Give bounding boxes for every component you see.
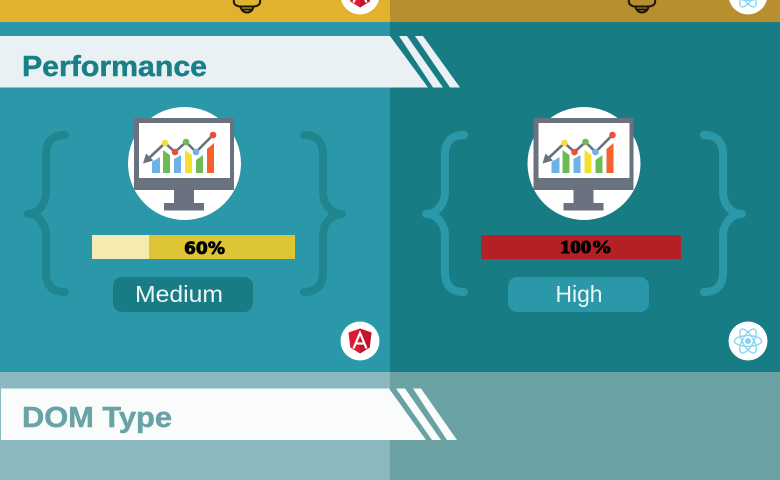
label pill: High: High	[556, 281, 602, 307]
label pill: High	[508, 277, 649, 312]
icon: monitor right	[528, 107, 640, 220]
heading: DOM Type: DOM Type	[22, 402, 172, 434]
progress bar: 100%	[481, 235, 681, 259]
badge: Angular	[340, 322, 380, 360]
icon: bulb right	[629, 0, 655, 12]
badge: React top	[728, 0, 768, 14]
badge: React	[728, 322, 768, 360]
icon: monitor left	[128, 107, 241, 220]
heading: Performance: Performance	[22, 51, 207, 83]
panel: performance right	[390, 22, 780, 372]
top yellow band: left	[0, 0, 390, 22]
panel: DOM type right	[390, 372, 780, 480]
label pill: Medium: Medium	[135, 281, 223, 307]
panel: performance left	[0, 22, 390, 372]
panel: DOM type left	[0, 372, 390, 480]
heading banner: DOM Type	[1, 388, 457, 440]
brace: left panel closing	[304, 135, 342, 292]
brace: right panel opening	[426, 135, 464, 292]
badge: Angular top	[340, 0, 380, 14]
heading banner: Performance	[0, 36, 460, 88]
top yellow band: right	[390, 0, 780, 22]
label pill: Medium	[113, 277, 253, 312]
brace: left panel opening	[28, 135, 65, 292]
icon: bulb left	[234, 0, 260, 12]
brace: right panel closing	[704, 135, 742, 292]
progress bar: 60%: 60%	[184, 239, 225, 259]
progress bar: 100%: 100%	[560, 237, 612, 257]
progress bar: 60%	[92, 235, 295, 259]
